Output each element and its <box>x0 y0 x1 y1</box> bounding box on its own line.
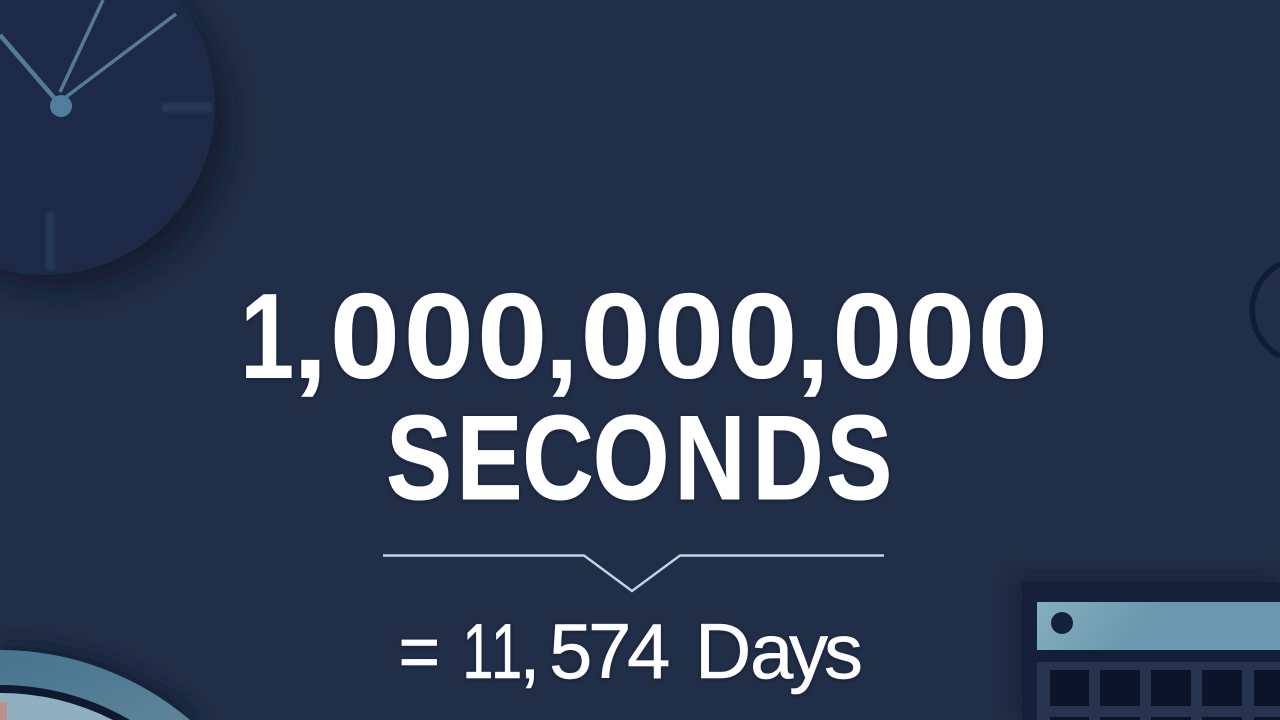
calendar date cells <box>1050 670 1280 720</box>
equivalence text: ,574Days <box>519 607 863 695</box>
calendar header bar <box>1037 602 1280 650</box>
headline unit: SECONDS <box>386 392 892 525</box>
equivalence text: 11 <box>462 608 522 695</box>
icon: partial ring at right edge <box>1252 264 1280 356</box>
divider with downward chevron <box>383 556 884 591</box>
icon: gauge at bottom left <box>0 642 206 720</box>
headline number: 1 <box>240 269 294 405</box>
equivalence text: = <box>398 607 440 695</box>
icon: calendar <box>1012 574 1280 720</box>
icon: wall clock <box>0 0 227 289</box>
headline number: ,000,000,000 <box>292 268 1048 404</box>
calendar header dot <box>1051 612 1073 634</box>
